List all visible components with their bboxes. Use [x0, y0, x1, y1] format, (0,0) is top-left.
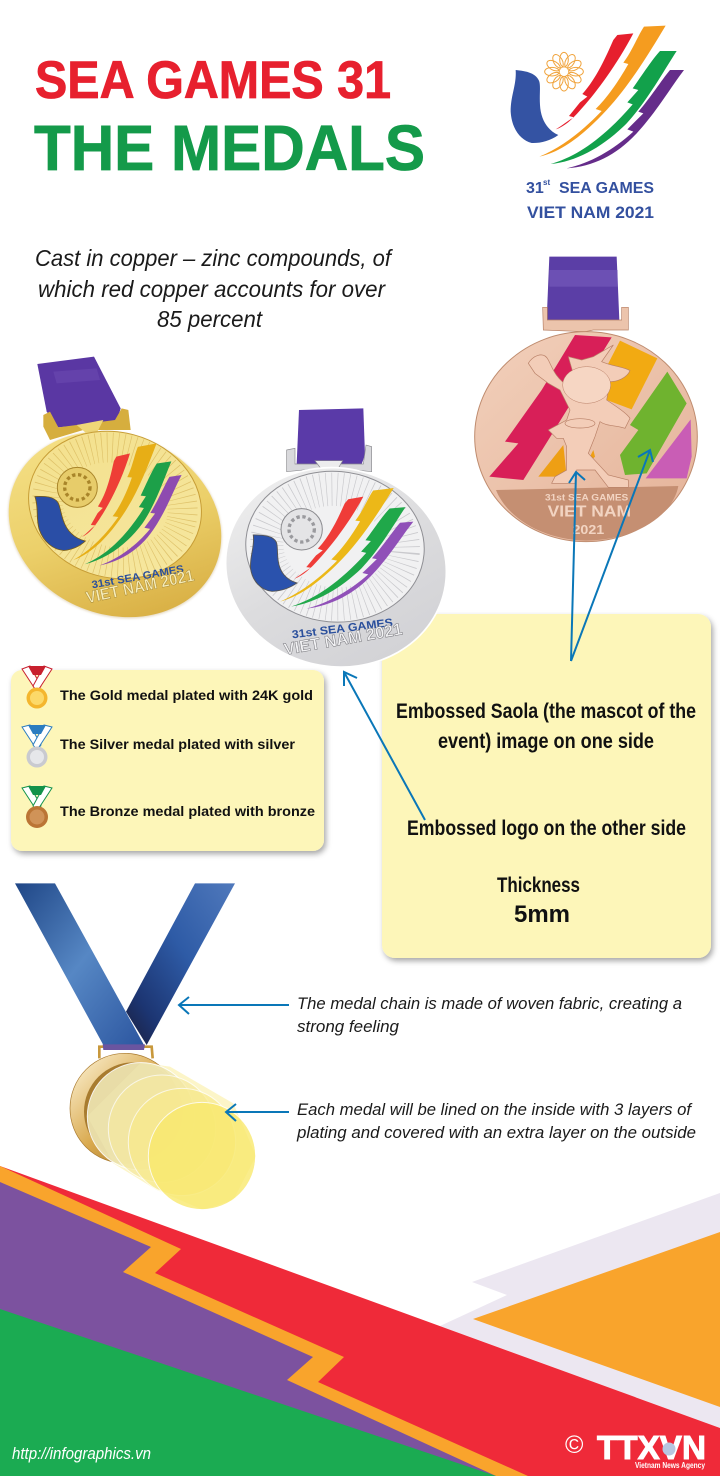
- chain and layers captions: Each medal will be lined on the inside with 3 layers of: [297, 1100, 693, 1119]
- panel: medal details: Thickness: [497, 874, 580, 897]
- legend labels: [60, 687, 315, 819]
- chain and layers captions: [296, 994, 696, 1142]
- intro text: which red copper accounts for over: [38, 276, 386, 302]
- silver medal: [208, 408, 464, 686]
- logo: SEA Games 31: SEA GAMES: [559, 180, 654, 197]
- title: THE MEDALS: [34, 112, 425, 184]
- legend labels: The Silver medal plated with silver: [60, 736, 296, 752]
- agency logo: [565, 1429, 706, 1470]
- legend labels: The Gold medal plated with 24K gold: [60, 687, 313, 703]
- bronze medal: [475, 257, 697, 542]
- panel: medal types legend: [11, 666, 324, 851]
- agency logo: Vietnam News Agency: [635, 1461, 705, 1470]
- logo: SEA Games 31: VIET NAM 2021: [527, 203, 654, 222]
- title: [34, 51, 425, 184]
- gold medal: 31st SEA GAMES: [91, 563, 185, 591]
- chain and layers captions: The medal chain is made of woven fabric, creating a: [297, 994, 682, 1013]
- arrow: chain: [179, 997, 289, 1014]
- source url: http://infographics.vn: [12, 1444, 151, 1463]
- bronze medal: 2021: [572, 523, 604, 537]
- arrows: from details panel to bronze medal: [569, 450, 653, 661]
- chain and layers captions: plating and covered with an extra layer on the outside: [296, 1123, 696, 1142]
- logo: SEA Games 31: 31: [526, 180, 544, 197]
- gold medal: [0, 357, 250, 650]
- icon: bronze medal: [22, 786, 52, 828]
- footer graphic: [0, 1166, 720, 1476]
- logo: SEA Games 31: st: [543, 178, 550, 187]
- icon: silver medal: [22, 725, 52, 768]
- title: SEA GAMES 31: [35, 51, 391, 110]
- silver medal: VIET NAM 2021: [282, 619, 404, 659]
- logo: SEA Games 31: [511, 26, 684, 222]
- bronze medal: 31st SEA GAMES: [545, 493, 628, 503]
- panel: medal details: [382, 614, 711, 958]
- intro text: Cast in copper – zinc compounds, of: [35, 245, 393, 271]
- gold medal: VIET NAM 2021: [84, 566, 196, 607]
- chain and layers captions: strong feeling: [297, 1017, 400, 1036]
- agency logo: TTXVN: [597, 1429, 706, 1466]
- panel: medal details: 5mm: [514, 901, 570, 928]
- icon: gold medal: [22, 666, 52, 708]
- arrow: to silver medal logo: [344, 672, 425, 820]
- agency logo: ©: [565, 1431, 584, 1459]
- arrow: layers: [226, 1104, 289, 1121]
- medal layers diagram: [15, 883, 256, 1210]
- panel: medal details: event) image on one side: [438, 730, 654, 753]
- silver medal: 31st SEA GAMES: [291, 617, 394, 641]
- legend labels: The Bronze medal plated with bronze: [60, 803, 315, 819]
- intro text: 85 percent: [157, 306, 264, 332]
- intro text: [35, 245, 393, 332]
- bronze medal: VIET NAM: [548, 504, 631, 521]
